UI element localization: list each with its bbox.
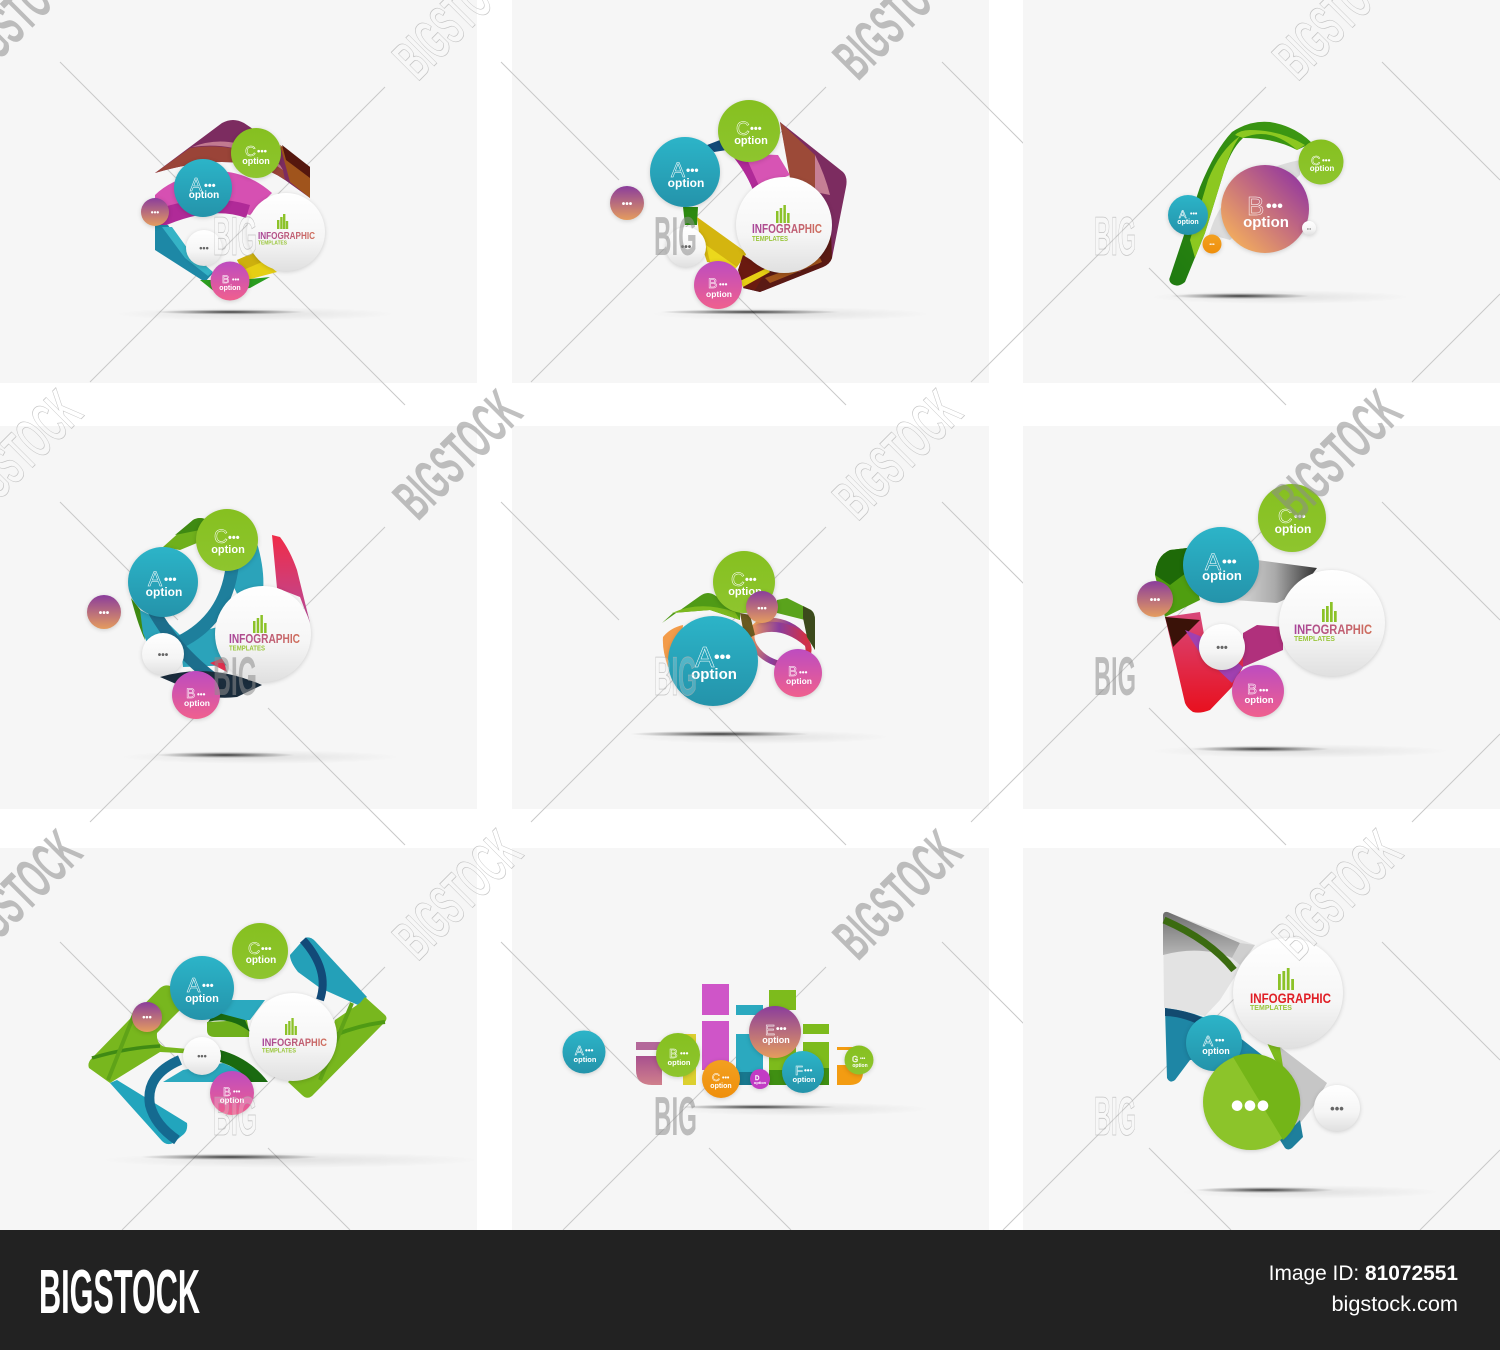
circle: C option: C bbox=[736, 119, 750, 140]
circle: A option: A bbox=[190, 175, 202, 195]
circle: A option: ••• bbox=[1190, 211, 1198, 218]
circle: B option large bbox=[1221, 165, 1309, 253]
circle: B option: B bbox=[788, 663, 797, 679]
circle: E option bbox=[749, 1006, 801, 1058]
circle: B option: ••• bbox=[232, 277, 240, 284]
circle: infographic title bbox=[249, 993, 337, 1081]
double arrow ribbon shapes bbox=[88, 937, 386, 1144]
circle: F option bbox=[782, 1051, 824, 1093]
circle: infographic title bbox=[1279, 570, 1385, 676]
watermarks: BIG: BIG bbox=[213, 645, 257, 707]
circle: white dots: ••• bbox=[1330, 1101, 1344, 1116]
circle: A option large: A bbox=[695, 642, 715, 674]
circle: A option: ••• bbox=[585, 1046, 594, 1055]
circle: A option bbox=[128, 547, 198, 617]
circle: infographic title: TEMPLATES bbox=[1294, 634, 1335, 643]
circle: infographic title: INFOGRAPHIC bbox=[1294, 622, 1372, 637]
circle: B option: ••• bbox=[719, 280, 728, 289]
circle: infographic title bbox=[1233, 938, 1343, 1048]
circle: white dots bbox=[666, 227, 706, 267]
circle: infographic title: TEMPLATES bbox=[1250, 1003, 1292, 1012]
circle: A option: option bbox=[146, 585, 182, 599]
circle: B option: option bbox=[706, 289, 732, 299]
circle: G option: option bbox=[852, 1063, 868, 1069]
text: BIG bbox=[1094, 205, 1136, 267]
circle: C option: ••• bbox=[228, 532, 240, 544]
circle: small purple: ••• bbox=[142, 1012, 152, 1022]
triangle ribbon shapes bbox=[1155, 548, 1317, 713]
circle: small purple: ••• bbox=[622, 199, 633, 210]
circle: infographic title: INFOGRAPHIC bbox=[1250, 990, 1331, 1006]
circle: infographic title bbox=[736, 177, 832, 273]
circle: A option bbox=[174, 159, 232, 217]
circle: infographic title bbox=[247, 193, 325, 271]
circle: C option: option bbox=[1310, 164, 1334, 173]
circle: E option: option bbox=[762, 1035, 790, 1045]
circle: C option: C bbox=[731, 570, 745, 591]
circle: A option: ••• bbox=[1215, 1035, 1224, 1045]
circle: C option: C bbox=[1311, 153, 1320, 168]
hexagon ribbon shapes bbox=[155, 120, 310, 292]
circle: B option large: ••• bbox=[1266, 198, 1283, 215]
circle: D option: D bbox=[755, 1076, 760, 1082]
circle: A option: ••• bbox=[686, 163, 699, 177]
circle: white dots: ••• bbox=[197, 1051, 207, 1061]
circle: C option bbox=[1258, 484, 1326, 552]
circle: A option: A bbox=[1179, 209, 1187, 221]
circle: small purple bbox=[87, 595, 121, 629]
circle: C option: ••• bbox=[745, 574, 757, 586]
circle: A option large: ••• bbox=[714, 649, 731, 666]
arrowhead ribbon shapes bbox=[1163, 912, 1327, 1150]
circle: large green dots bbox=[1203, 1054, 1300, 1150]
watermarks: BIGSTOCK diagonal: BIGSTOCK bbox=[381, 818, 534, 971]
circle: B option: ••• bbox=[233, 1089, 241, 1096]
circle: C option: ••• bbox=[722, 1075, 730, 1082]
coloured bars bbox=[636, 984, 863, 1085]
circle: G option: ••• bbox=[860, 1056, 866, 1062]
circle: white dots: ••• bbox=[681, 242, 692, 253]
circle: C option bbox=[232, 923, 288, 979]
circle: B option: option bbox=[220, 1096, 244, 1105]
circle: C option bbox=[718, 100, 780, 162]
watermarks: BIG: BIG bbox=[213, 1085, 257, 1147]
circle: A option bbox=[562, 1030, 606, 1074]
circle: C option: option bbox=[242, 156, 270, 166]
circle: infographic title: TEMPLATES bbox=[229, 646, 265, 652]
circle: A option: option bbox=[185, 993, 219, 1005]
circle: B option: B bbox=[669, 1046, 678, 1061]
circle: A option: option bbox=[189, 190, 219, 201]
circle: B option bbox=[694, 261, 742, 309]
circle: A option: ••• bbox=[164, 572, 177, 586]
circle: A option: A bbox=[575, 1043, 584, 1058]
circle: B option: ••• bbox=[799, 668, 808, 677]
circle: B option: ••• bbox=[197, 690, 206, 699]
circle: A option: A bbox=[187, 975, 201, 997]
circle: F option: ••• bbox=[804, 1066, 813, 1075]
circle: C option bbox=[702, 1060, 740, 1098]
circle: A option: A bbox=[1205, 549, 1221, 576]
watermarks: BIG: BIG bbox=[654, 645, 697, 707]
circle: small purple: ••• bbox=[757, 603, 767, 613]
circle: B option: option bbox=[786, 676, 812, 686]
circle: A option: option bbox=[1177, 219, 1199, 226]
circle: infographic title: TEMPLATES bbox=[752, 236, 788, 243]
circle: small orange: ••• bbox=[1209, 242, 1215, 248]
watermarks: BIG: BIG bbox=[654, 205, 697, 267]
circle: G option: G bbox=[852, 1055, 858, 1064]
circle: small white bbox=[1302, 221, 1316, 235]
circle: infographic title bbox=[215, 586, 311, 682]
circle: white dots bbox=[186, 230, 222, 266]
watermarks: BIGSTOCK diagonal: BIGSTOCK bbox=[821, 378, 974, 531]
circle: B option: option bbox=[668, 1058, 691, 1067]
circle: B option: option bbox=[219, 285, 241, 292]
circle: A option: option bbox=[574, 1055, 597, 1064]
circle: A option: A bbox=[1203, 1033, 1213, 1050]
circle: C option: C bbox=[214, 527, 228, 548]
circle: white dots: ••• bbox=[158, 650, 169, 661]
circle: A option bbox=[650, 137, 720, 207]
circle: B option bbox=[210, 262, 250, 300]
circle: A option: A bbox=[671, 159, 685, 182]
circle: small purple bbox=[610, 186, 644, 220]
circle: A option: ••• bbox=[204, 180, 216, 192]
circle: small purple: ••• bbox=[1150, 595, 1161, 606]
green arc ribbon bbox=[1169, 122, 1312, 286]
circle: F option: option bbox=[793, 1075, 816, 1084]
circle: C option: C bbox=[1278, 506, 1292, 528]
circle: B option bbox=[210, 1071, 254, 1115]
circle: C option: option bbox=[710, 1083, 732, 1090]
watermarks: BIGSTOCK diagonal bbox=[0, 0, 1414, 971]
circle: G option bbox=[844, 1046, 874, 1074]
circle: small purple: ••• bbox=[99, 608, 110, 619]
circle: small purple: ••• bbox=[151, 208, 159, 217]
circle: B option: ••• bbox=[680, 1049, 689, 1058]
watermarks: BIG: BIG bbox=[654, 1085, 697, 1147]
circle: infographic title: INFOGRAPHIC bbox=[258, 231, 315, 242]
panel 8: bar chart infographic bbox=[501, 848, 1060, 1230]
circle: A option bbox=[1186, 1015, 1242, 1071]
circle: small purple bbox=[746, 591, 778, 623]
circle: white dots bbox=[183, 1037, 221, 1075]
circle: B option: B bbox=[1247, 681, 1257, 698]
circle: A option: ••• bbox=[1222, 553, 1237, 569]
circle: B option large: option bbox=[1243, 214, 1289, 231]
circle: A option: option bbox=[1202, 568, 1242, 583]
circle: small purple bbox=[132, 1002, 162, 1032]
circle: C option: option bbox=[734, 135, 768, 147]
circle: A option: option bbox=[1202, 1046, 1230, 1056]
panel 2: pentagon infographic bbox=[501, 0, 1060, 405]
website: bigstock.com bbox=[1331, 1291, 1458, 1316]
panel 3: green arc infographic bbox=[971, 0, 1500, 405]
circle: infographic title: TEMPLATES bbox=[258, 240, 287, 246]
circle: C option: ••• bbox=[750, 123, 762, 135]
circle: C option: option bbox=[1275, 522, 1311, 536]
panel 6: colourful triangle infographic bbox=[971, 426, 1500, 845]
circle: B option bbox=[1232, 665, 1284, 717]
teal and green ring shapes bbox=[131, 518, 310, 698]
circle: B option: B bbox=[223, 1085, 231, 1099]
text: BIG bbox=[1094, 645, 1136, 707]
circle: large green dots: ••• bbox=[1231, 1085, 1269, 1126]
circle: infographic title: INFOGRAPHIC bbox=[229, 632, 300, 646]
circle: C option: ••• bbox=[1294, 511, 1306, 523]
green leaves and ring shapes bbox=[662, 593, 816, 674]
circle: infographic title: INFOGRAPHIC bbox=[262, 1037, 327, 1049]
circle: small white: ••• bbox=[1307, 226, 1312, 231]
circle: C option: C bbox=[712, 1072, 720, 1084]
watermarks: BIG bbox=[213, 205, 1136, 1147]
circle: C option: ••• bbox=[257, 146, 268, 157]
circle: C option: option bbox=[728, 586, 762, 598]
circle: white dots bbox=[1199, 624, 1245, 670]
text: BIG bbox=[1094, 1085, 1136, 1147]
circle: infographic title: INFOGRAPHIC bbox=[752, 222, 822, 236]
circle: white dots: ••• bbox=[199, 243, 209, 253]
circle: E option: ••• bbox=[776, 1024, 787, 1035]
circle: A option: A bbox=[148, 568, 162, 591]
circle: C option: ••• bbox=[261, 944, 272, 955]
circle: C option: ••• bbox=[1322, 156, 1331, 165]
circle: B option: option bbox=[184, 698, 210, 708]
circle: F option: F bbox=[795, 1063, 803, 1078]
circle: A option bbox=[1168, 195, 1208, 235]
circle: white dots: ••• bbox=[1216, 642, 1228, 654]
circle: white dots bbox=[1314, 1085, 1360, 1131]
circle: white dots bbox=[142, 633, 184, 675]
image id: Image ID: 81072551 bbox=[1269, 1262, 1458, 1285]
panel 5: ring and leaves infographic bbox=[501, 426, 1060, 845]
circle: C option bbox=[196, 509, 258, 571]
circle: D option bbox=[750, 1069, 770, 1089]
footer bar: BIGSTOCK bbox=[39, 1258, 200, 1327]
circle: C option bbox=[1298, 140, 1344, 184]
panel 1: hexagon infographic bbox=[0, 0, 477, 405]
circle: A option bbox=[170, 956, 234, 1020]
circle: C option: C bbox=[245, 143, 256, 160]
circle: C option bbox=[713, 551, 775, 613]
circle: infographic title: TEMPLATES bbox=[262, 1048, 297, 1054]
panel 9: arrowhead infographic bbox=[1003, 848, 1500, 1230]
circle: small orange bbox=[1202, 234, 1222, 254]
circle: C option bbox=[231, 128, 281, 178]
circle: A option: ••• bbox=[202, 980, 214, 992]
panel 7: double arrow infographic bbox=[0, 848, 480, 1230]
circle: C option: option bbox=[246, 955, 276, 966]
circle: E option: E bbox=[765, 1022, 775, 1039]
circle: B option bbox=[172, 671, 220, 719]
circle: B option bbox=[774, 649, 822, 697]
panel 4: teal ring infographic bbox=[0, 426, 477, 845]
circle: B option large: B bbox=[1247, 191, 1264, 221]
circle: D option: option bbox=[754, 1080, 767, 1085]
circle: B option: ••• bbox=[1259, 685, 1268, 695]
circle: A option: option bbox=[668, 176, 704, 190]
circle: C option: option bbox=[211, 544, 245, 556]
pentagon ribbon shapes bbox=[683, 122, 847, 292]
circle: C option: C bbox=[248, 939, 260, 958]
circle: A option large: option bbox=[691, 666, 737, 683]
circle: A option bbox=[1183, 527, 1259, 603]
circle: B option: B bbox=[186, 685, 195, 701]
circle: B option: option bbox=[1244, 695, 1274, 706]
circle: B option bbox=[656, 1033, 700, 1077]
watermarks: BIG: BIG bbox=[213, 205, 257, 267]
footer bar bbox=[0, 1230, 1500, 1350]
circle: B option: B bbox=[708, 275, 717, 291]
circle: B option: B bbox=[222, 274, 229, 286]
circle: small purple bbox=[1137, 581, 1173, 617]
watermarks: BIGSTOCK diagonal: BIGSTOCK bbox=[381, 378, 534, 531]
circle: A option large bbox=[668, 616, 758, 706]
circle: small purple bbox=[141, 198, 169, 226]
watermarks: BIGSTOCK diagonal: BIGSTOCK bbox=[821, 818, 974, 971]
